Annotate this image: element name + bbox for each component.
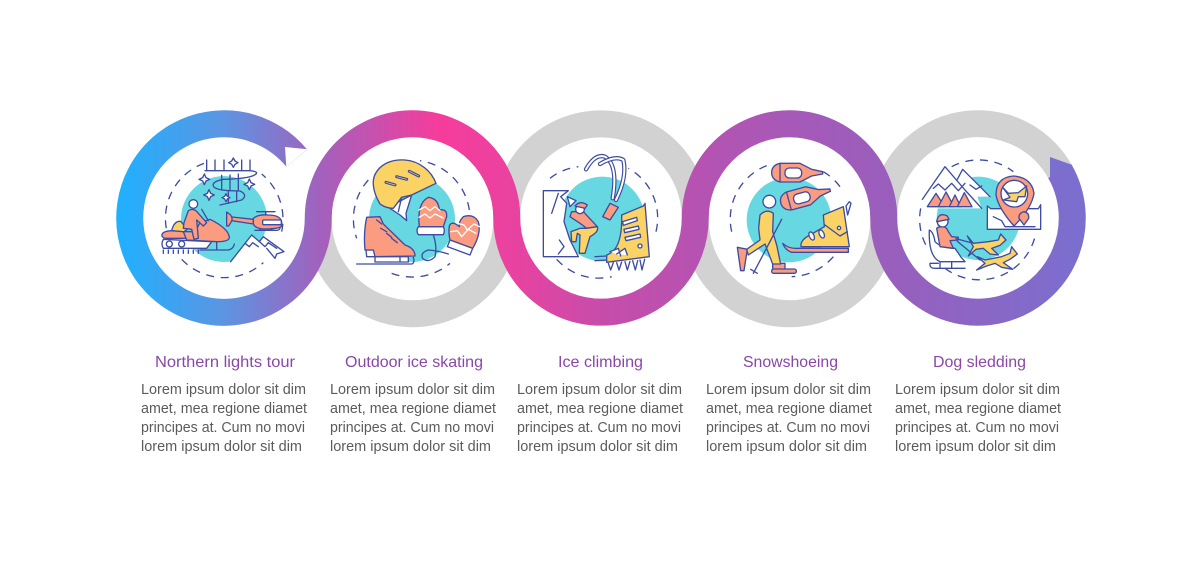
text block: Northern lights tour description: principes at. Cum no movi	[141, 419, 305, 436]
heading: Ice climbing: Ice climbing	[558, 354, 643, 371]
grey background ribbon arcs	[318, 124, 1060, 314]
heading: Northern lights tour: Northern lights tour	[155, 354, 296, 371]
column: Snowshoeing	[706, 354, 873, 455]
heading: Dog sledding: Dog sledding	[933, 354, 1026, 371]
text block: Outdoor ice skating description: lorem ipsum dolor sit dim	[330, 438, 491, 455]
text block: Snowshoeing description: Lorem ipsum dolor sit dim	[706, 381, 871, 398]
icon: helmet, ice skate and mittens	[353, 160, 479, 277]
gradient ribbon with arrow ends	[130, 124, 1073, 312]
text block: Outdoor ice skating description: amet, mea regione diamet	[330, 400, 497, 417]
text block: Snowshoeing description: lorem ipsum dolor sit dim	[706, 438, 867, 455]
column: Dog sledding	[895, 354, 1062, 455]
column: Outdoor ice skating	[330, 354, 497, 455]
text block: Northern lights tour description	[141, 381, 308, 455]
text block: Dog sledding description: amet, mea regione diamet	[895, 400, 1062, 417]
text block: Snowshoeing description	[706, 381, 873, 455]
column: Ice climbing	[517, 354, 684, 455]
text block: Outdoor ice skating description	[330, 381, 497, 455]
text block: Ice climbing description: amet, mea regione diamet	[517, 400, 684, 417]
icon: ice climber, ice axes and boot	[543, 156, 658, 278]
text block: Ice climbing description: principes at. Cum no movi	[517, 419, 681, 436]
heading: Outdoor ice skating: Outdoor ice skating	[345, 354, 483, 371]
text block: Ice climbing description: Lorem ipsum dolor sit dim	[517, 381, 682, 398]
icon: snowshoes, hiker with pole and boot	[730, 163, 851, 277]
text block: Dog sledding description	[895, 381, 1062, 455]
text block: Ice climbing description	[517, 381, 684, 455]
icon: dog sled, mountains and map pin	[920, 160, 1041, 280]
text block: Dog sledding description: lorem ipsum dolor sit dim	[895, 438, 1056, 455]
text block: Northern lights tour description: amet, mea regione diamet	[141, 400, 308, 417]
text block: Dog sledding description: principes at. Cum no movi	[895, 419, 1059, 436]
text block: Snowshoeing description: amet, mea regione diamet	[706, 400, 873, 417]
column: Northern lights tour	[141, 354, 308, 455]
text block: Snowshoeing description: principes at. Cum no movi	[706, 419, 870, 436]
text block: Outdoor ice skating description: principes at. Cum no movi	[330, 419, 494, 436]
text block: Ice climbing description: lorem ipsum dolor sit dim	[517, 438, 678, 455]
heading: Snowshoeing: Snowshoeing	[743, 354, 838, 371]
icon: snowmobile, helicopter and northern lights	[162, 158, 284, 278]
text block: Northern lights tour description: lorem ipsum dolor sit dim	[141, 438, 302, 455]
text block: Outdoor ice skating description: Lorem ipsum dolor sit dim	[330, 381, 495, 398]
text block: Northern lights tour description: Lorem ipsum dolor sit dim	[141, 381, 306, 398]
text block: Dog sledding description: Lorem ipsum dolor sit dim	[895, 381, 1060, 398]
